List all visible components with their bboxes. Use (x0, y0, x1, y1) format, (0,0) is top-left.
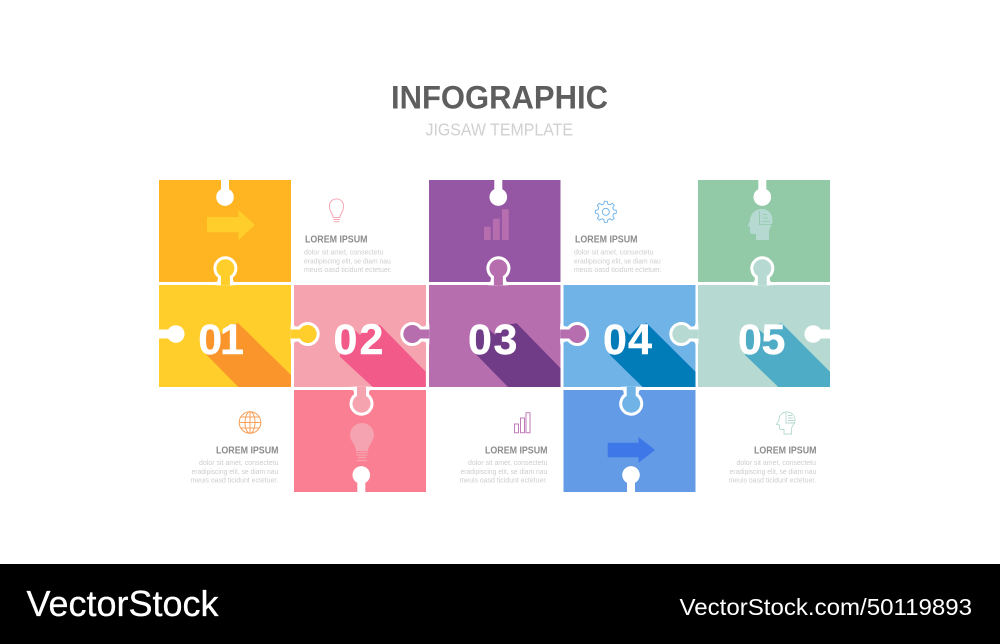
text block: head note (728, 412, 816, 484)
text block: bars note: dolor sit amet, consectetu (468, 458, 548, 467)
shadow 05 (745, 323, 830, 387)
number 05: 05 (738, 316, 785, 364)
text block: bars note: meuis oasd ticidunt ectetuer. (460, 476, 547, 484)
number 03: 03 (468, 316, 517, 364)
panel: piece 02 (294, 285, 426, 387)
connector: 03 up (488, 259, 509, 285)
subtitle: JIGSAW TEMPLATE (426, 119, 573, 139)
panel: piece 01 (159, 285, 291, 387)
text block: gear note: LOREM IPSUM (575, 235, 638, 246)
text block: bulb note: meuis oasd ticidunt ectetuer. (304, 265, 392, 274)
connector: 02 down (351, 387, 372, 413)
panel: top piece green (698, 180, 830, 282)
shadow 04 (610, 323, 696, 387)
connector: 03 right (560, 324, 586, 344)
text block: globe note (190, 412, 278, 484)
connector: 01 right (291, 324, 317, 344)
text block: gear note: eradipiscing elit, se diam nau (574, 256, 661, 265)
text block: globe note: eradipiscing elit, se diam nau (192, 467, 278, 476)
text block: bars note: eradipiscing elit, se diam nau (460, 467, 547, 476)
icon: light bulb pink piece (350, 423, 374, 460)
jigsaw connectors (215, 259, 773, 413)
connector: 01 up (215, 259, 236, 285)
text block: gear note (574, 201, 662, 274)
number 02: 02 (334, 316, 383, 364)
text block: head note: meuis oasd ticidunt ectetuer. (728, 476, 816, 484)
text block: bulb note: dolor sit amet, consectetu (304, 248, 384, 256)
panel: piece 04 (564, 285, 696, 387)
connector: 05 up (752, 259, 773, 285)
footer brand: VectorStock (26, 583, 219, 624)
icon: outline gear (595, 201, 616, 222)
text block: bulb note: LOREM IPSUM (305, 235, 368, 246)
text block: globe note: LOREM IPSUM (216, 446, 278, 456)
text block: bars note (460, 413, 548, 484)
icon: head green piece (748, 209, 772, 240)
icon: arrow blue piece (608, 437, 655, 463)
text block: globe note: meuis oasd ticidunt ectetuer. (190, 476, 278, 484)
text block: head note: dolor sit amet, consectetu (736, 458, 816, 467)
title: INFOGRAPHIC (391, 79, 608, 115)
number 04: 04 (603, 316, 652, 364)
text block: globe note: dolor sit amet, consectetu (199, 458, 278, 467)
text block: gear note: dolor sit amet, consectetu (574, 248, 654, 256)
text block: gear note: meuis oasd ticidunt ectetuer. (574, 265, 662, 274)
text block: bulb note: eradipiscing elit, se diam nau (304, 256, 391, 265)
icon: outline globe (239, 412, 261, 433)
shadow 02 (340, 325, 426, 387)
panel: bottom piece pink (294, 390, 426, 492)
text block: head note: eradipiscing elit, se diam nau (730, 467, 816, 476)
panel: top piece orange (159, 180, 291, 282)
text block: head note: LOREM IPSUM (754, 446, 816, 456)
icon: outline bulb (329, 199, 344, 222)
panel: piece 05 (698, 285, 830, 387)
number 01: 01 (198, 316, 244, 364)
connector: 04 down (621, 387, 642, 413)
icon: arrow orange piece (207, 210, 255, 240)
connector: 05 left (672, 324, 698, 344)
icon: outline head (776, 412, 795, 434)
footer bar (0, 564, 1000, 644)
shadow 01 (205, 323, 291, 387)
icon: outline bars (514, 413, 530, 433)
panel: bottom piece blue (564, 390, 696, 492)
panel: top piece purple (429, 180, 560, 282)
footer url: VectorStock.com/50119893 (680, 594, 972, 620)
text block: bulb note (304, 199, 392, 274)
connector: 03 left (403, 324, 429, 344)
text block: bars note: LOREM IPSUM (485, 446, 548, 456)
shadow 03 (475, 323, 560, 387)
icon: bar chart purple piece (484, 209, 509, 240)
panel: piece 03 (429, 285, 560, 387)
